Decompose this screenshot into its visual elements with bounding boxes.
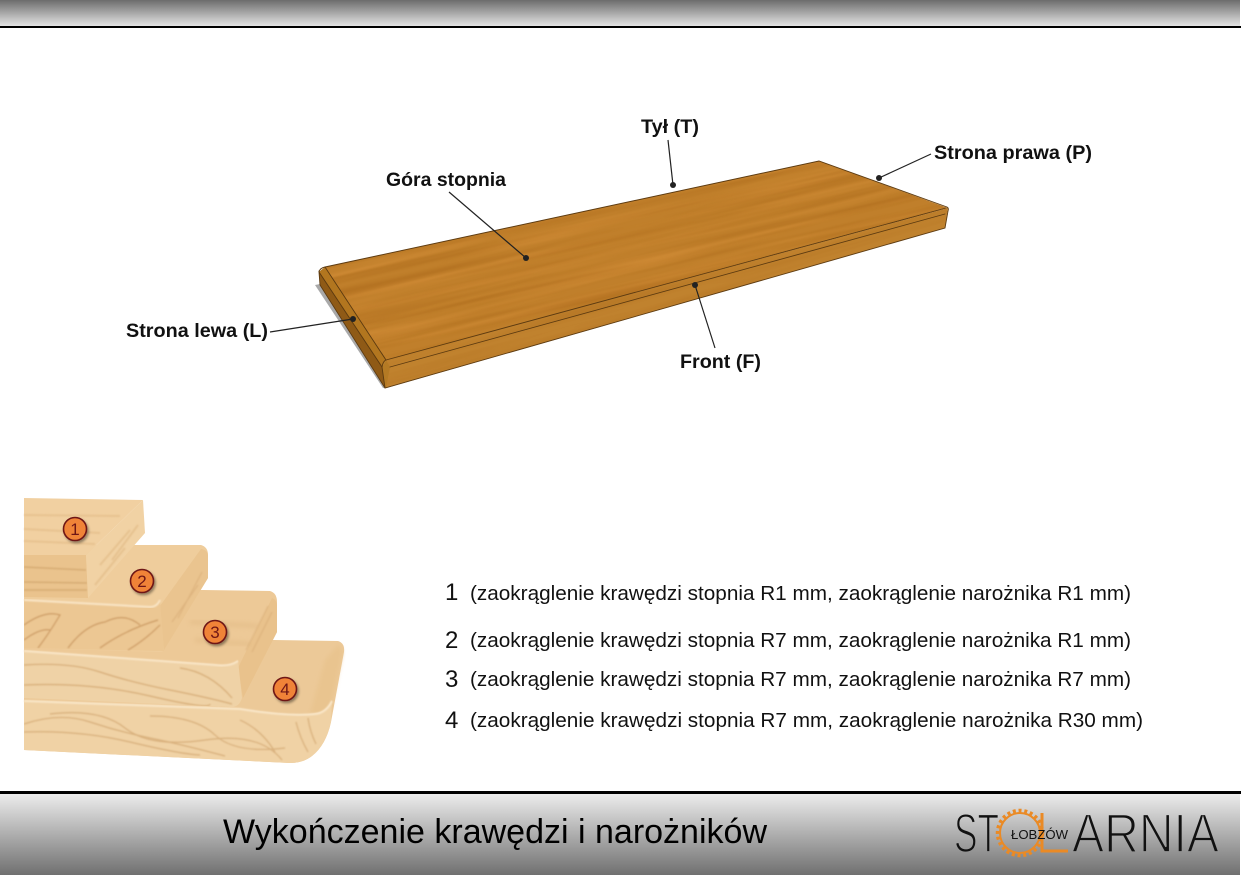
legend row 4: (zaokrąglenie krawędzi stopnia R7 mm, zaokrąglenie narożnika R30 mm) — [470, 710, 1143, 732]
badge 1 — [64, 518, 86, 540]
legend row 4: 4 — [445, 707, 458, 734]
front edge of tread — [382, 208, 948, 388]
left side of tread — [319, 267, 386, 388]
badge 1: 1 — [70, 520, 80, 539]
header bar — [0, 0, 1241, 28]
badge 2 — [130, 570, 154, 592]
legend row 3: 3 — [445, 666, 458, 693]
wooden stair tread illustration — [315, 160, 949, 389]
edge profile samples: stacked boards — [24, 498, 344, 763]
logo L — [1042, 813, 1068, 851]
label: Tył (T): Tył (T) — [641, 117, 699, 138]
label: Strona prawa (P): Strona prawa (P) — [934, 143, 1092, 164]
outline and grooves — [319, 161, 948, 388]
logo saw blade — [998, 810, 1042, 856]
label: Strona prawa (P) — [876, 143, 1092, 181]
board 4 — [24, 640, 344, 763]
label: Tył (T) — [641, 117, 699, 188]
legend row 1: (zaokrąglenie krawędzi stopnia R1 mm, zaokrąglenie narożnika R1 mm) — [470, 583, 1131, 605]
logo: Stolarnia Łobzów — [954, 802, 1219, 864]
top surface of tread — [326, 162, 948, 360]
footer bar — [0, 791, 1241, 875]
label: Front (F): Front (F) — [680, 352, 761, 373]
badge 2: 2 — [137, 572, 147, 591]
badge 3: 3 — [210, 623, 220, 642]
legend row 2: (zaokrąglenie krawędzi stopnia R7 mm, zaokrąglenie narożnika R1 mm) — [470, 630, 1131, 652]
logo Łobzów: ŁOBZÓW — [1011, 827, 1068, 842]
label: Front (F) — [680, 282, 761, 373]
label: Strona lewa (L) — [126, 316, 356, 342]
logo ST: ST — [954, 802, 999, 864]
board 1 — [24, 498, 145, 598]
badge 4: 4 — [280, 680, 290, 699]
board 3 — [24, 590, 277, 707]
legend: edge and corner descriptions — [445, 579, 1143, 734]
legend row 2: 2 — [445, 627, 458, 654]
board 2 — [24, 545, 208, 652]
label: Strona lewa (L): Strona lewa (L) — [126, 321, 268, 342]
badge 3 — [204, 620, 226, 644]
badge 4 — [274, 678, 296, 700]
cast shadow — [315, 284, 387, 388]
legend row 1: 1 — [445, 579, 458, 606]
logo ARNIA: ARNIA — [1072, 802, 1219, 864]
label: Góra stopnia — [386, 170, 529, 261]
footer title: Wykończenie krawędzi i narożników — [223, 813, 767, 851]
legend row 3: (zaokrąglenie krawędzi stopnia R7 mm, zaokrąglenie narożnika R7 mm) — [470, 669, 1131, 691]
label: Góra stopnia: Góra stopnia — [386, 170, 506, 191]
